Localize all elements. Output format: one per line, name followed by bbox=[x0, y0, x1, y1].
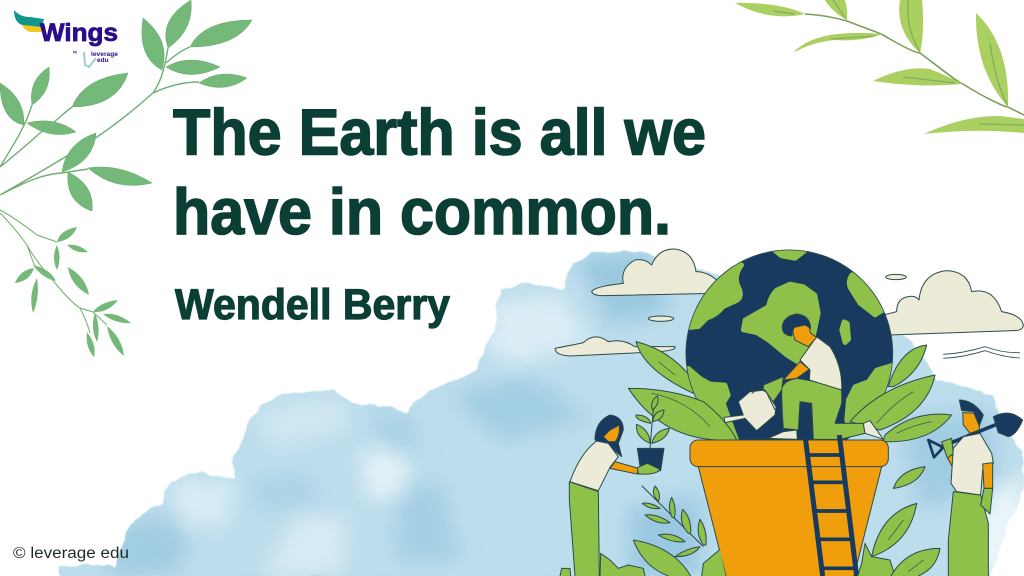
woman's glove bbox=[637, 463, 660, 474]
logo byline: by bbox=[73, 50, 77, 54]
woman's trousers bbox=[569, 482, 599, 576]
gardener's hair bbox=[959, 400, 983, 426]
plants at pot base, right bbox=[858, 503, 940, 576]
gardener's right arm bbox=[983, 463, 993, 488]
title: The Earth is all we bbox=[173, 96, 706, 168]
leaf cluster bbox=[0, 0, 252, 211]
leaves in front of globe bbox=[628, 362, 952, 442]
gardener's arm bbox=[947, 455, 958, 470]
logo byline: edu bbox=[97, 57, 109, 64]
gardener's right glove bbox=[981, 488, 993, 514]
woman's shirt bbox=[570, 441, 618, 491]
man's shoes bbox=[768, 421, 883, 439]
man's head bbox=[792, 323, 817, 347]
cloud left low bbox=[555, 337, 675, 356]
cloud right bbox=[883, 271, 1023, 335]
falling leaf bbox=[893, 467, 925, 488]
watercolor background bbox=[50, 240, 1024, 576]
watercolor bottom edge bbox=[60, 570, 990, 576]
logo swoosh bbox=[14, 10, 44, 32]
cloud left top bbox=[592, 249, 717, 296]
logo byline bbox=[73, 50, 118, 67]
left lower sprig bbox=[0, 210, 131, 357]
gardener's shirt bbox=[951, 433, 993, 495]
logo wordmark: Wings bbox=[40, 19, 118, 47]
wind lines bbox=[943, 347, 1020, 358]
logo: Wings by leverage edu bbox=[14, 10, 118, 67]
woman's face bbox=[603, 425, 619, 442]
title: have in common. bbox=[173, 175, 671, 248]
small cloud ovals bbox=[648, 274, 906, 321]
man's hair bbox=[782, 314, 811, 336]
gardener with shovel bbox=[928, 400, 1023, 576]
woman's hair bbox=[595, 415, 623, 457]
gardener's head bbox=[963, 413, 979, 433]
logo byline: leverage bbox=[91, 51, 118, 58]
title bbox=[173, 96, 706, 248]
man's shirt bbox=[800, 337, 842, 390]
shovel bbox=[928, 413, 1023, 457]
seated man watering the globe bbox=[724, 314, 883, 439]
man's arm and glove bbox=[783, 362, 809, 380]
woman holding seedling bbox=[569, 396, 669, 576]
leaves behind globe bbox=[636, 342, 927, 393]
watering can bbox=[724, 390, 776, 431]
gardener's glove bbox=[942, 438, 953, 458]
pot bbox=[690, 440, 888, 576]
globe bbox=[683, 250, 893, 457]
top right branch bbox=[735, 0, 1024, 134]
left top branch bbox=[0, 0, 252, 211]
author name: Wendell Berry bbox=[175, 282, 450, 329]
illustration: people caring for the Earth bbox=[555, 249, 1023, 576]
seedling in pot bbox=[636, 396, 669, 471]
plants at pot base, left bbox=[560, 486, 726, 576]
woman's arm bbox=[610, 462, 638, 474]
ladder bbox=[805, 435, 857, 576]
man's trousers bbox=[782, 378, 865, 439]
copyright footer: © leverage edu bbox=[13, 545, 129, 562]
gardener's trousers bbox=[948, 492, 988, 576]
